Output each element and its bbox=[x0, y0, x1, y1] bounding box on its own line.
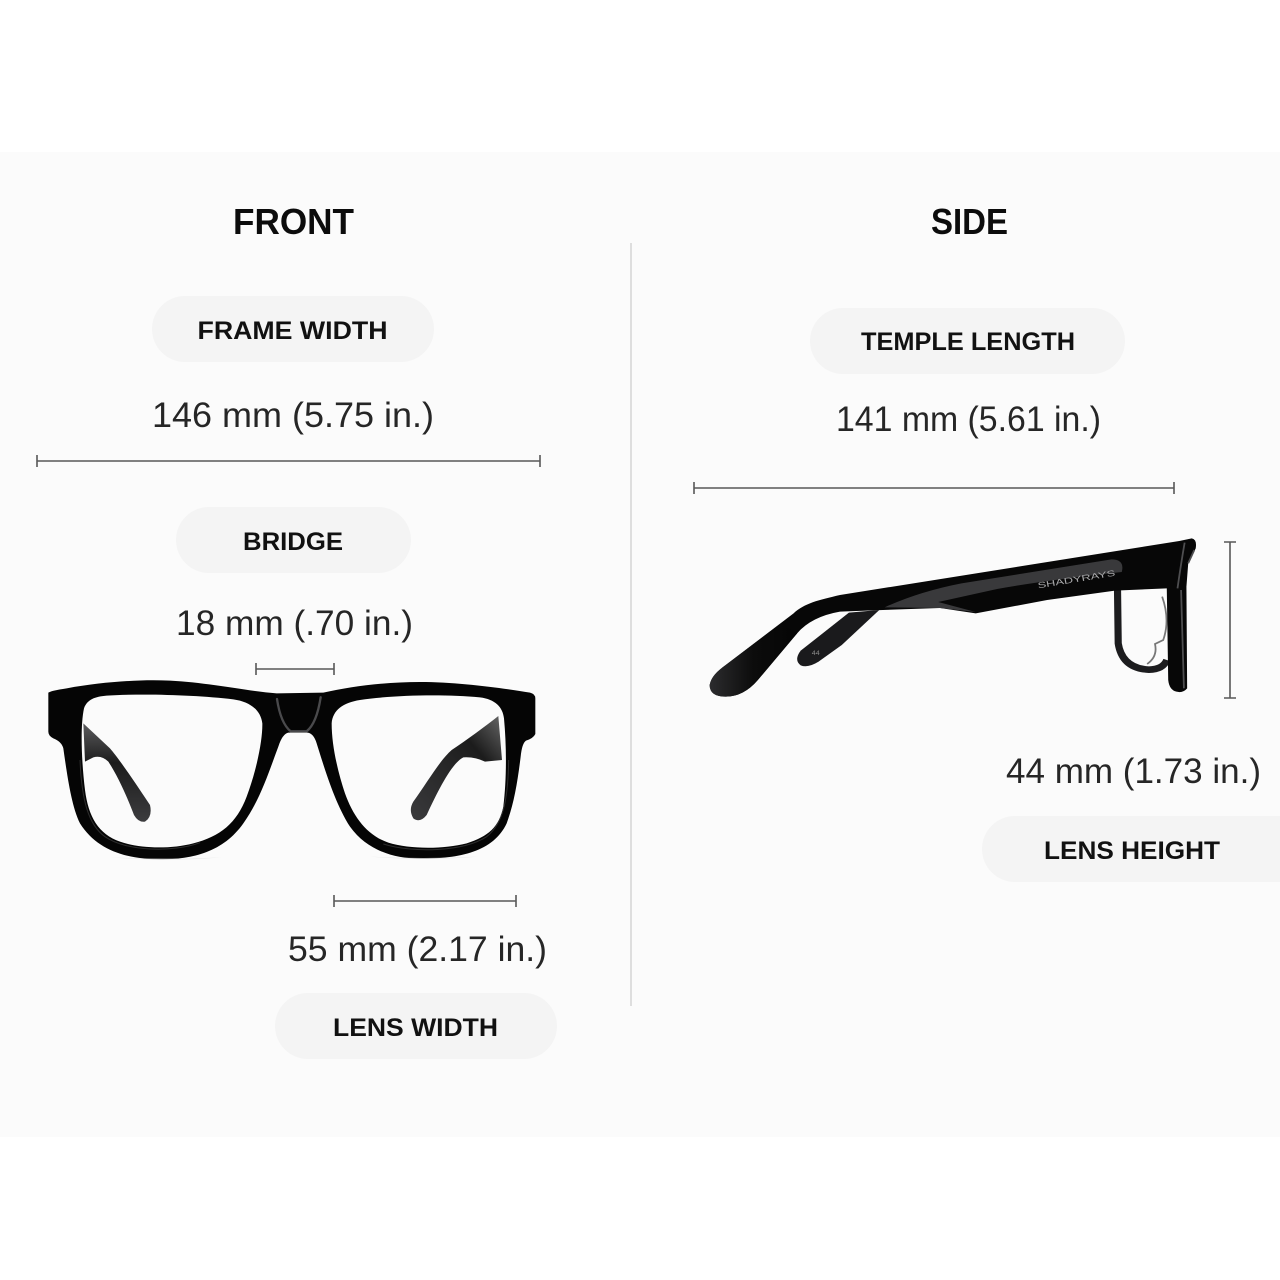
label pill: temple length: TEMPLE LENGTH bbox=[861, 328, 1075, 356]
label pill: frame width bbox=[152, 296, 434, 362]
temple grey panel bbox=[885, 559, 1122, 612]
label pill: bridge: BRIDGE bbox=[243, 528, 343, 556]
bridge highlight bbox=[277, 697, 321, 731]
measure line: lens height bbox=[1224, 542, 1236, 698]
value: frame width: 146 mm (5.75 in.) bbox=[152, 396, 434, 435]
label pill: lens width: LENS WIDTH bbox=[333, 1014, 498, 1042]
label pill: frame width: FRAME WIDTH bbox=[198, 317, 388, 345]
temple tip shading bbox=[710, 623, 797, 697]
label pill: lens height: LENS HEIGHT bbox=[1044, 837, 1220, 865]
nose pad bbox=[1147, 597, 1167, 664]
near temple and frame bbox=[710, 538, 1196, 697]
frame edge highlight bbox=[1178, 543, 1194, 688]
label pill: lens height bbox=[982, 816, 1280, 882]
value: lens width: 55 mm (2.17 in.) bbox=[288, 930, 547, 969]
far rim bbox=[1118, 588, 1167, 670]
heading: side: SIDE bbox=[931, 201, 1008, 242]
side view of glasses bbox=[710, 538, 1196, 697]
logo: SHADYRAYS: SHADYRAYS bbox=[1037, 568, 1116, 590]
value: lens height: 44 mm (1.73 in.) bbox=[1006, 752, 1261, 791]
measure line: bridge bbox=[256, 663, 334, 675]
size mark: 44 bbox=[812, 650, 820, 657]
left lens rim highlight bbox=[80, 760, 200, 849]
lens shadows bbox=[112, 857, 478, 860]
frame front bbox=[48, 680, 535, 859]
label pill: bridge bbox=[176, 507, 411, 573]
label pill: lens width bbox=[275, 993, 557, 1059]
value: bridge: 18 mm (.70 in.) bbox=[176, 604, 413, 643]
right lens rim highlight bbox=[383, 760, 509, 850]
label pill: temple length bbox=[810, 308, 1125, 374]
measure line: temple length bbox=[694, 482, 1174, 494]
front view of glasses bbox=[48, 680, 535, 860]
right temple arm bbox=[411, 716, 502, 820]
measure line: frame width bbox=[37, 455, 540, 467]
left temple arm bbox=[83, 723, 151, 822]
measure line: lens width bbox=[334, 895, 516, 907]
far temple arm bbox=[797, 610, 879, 666]
value: temple length: 141 mm (5.61 in.) bbox=[836, 400, 1101, 439]
heading: front: FRONT bbox=[233, 201, 354, 242]
